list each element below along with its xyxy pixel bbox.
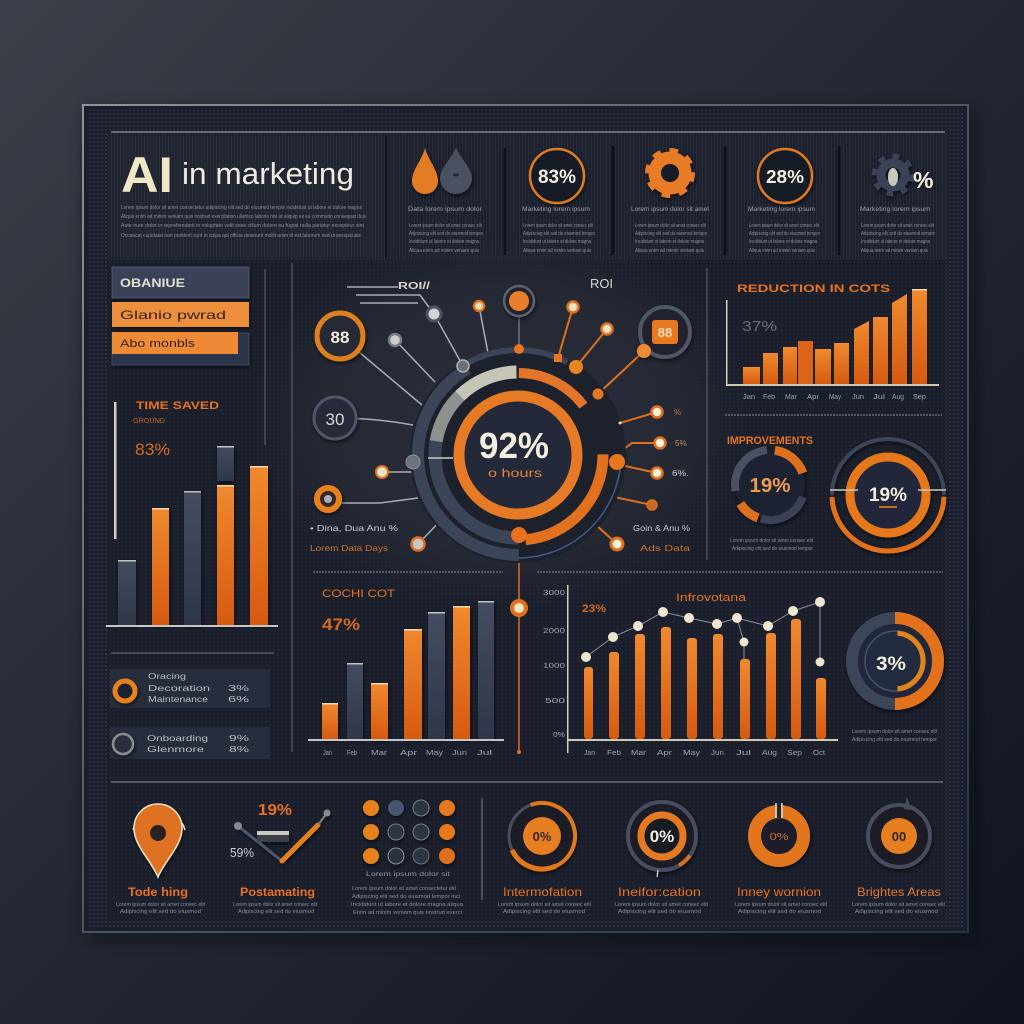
stat text	[635, 223, 707, 254]
bottom item: trend line	[230, 802, 330, 915]
caption: Brightes Areas	[857, 885, 941, 899]
row text	[148, 672, 249, 704]
caption: Intermofation	[503, 885, 582, 899]
stat text	[523, 223, 595, 254]
x axis labels: Feb	[347, 750, 357, 757]
note	[852, 902, 945, 915]
ring icon: 00	[892, 829, 906, 844]
donut note: Lorem ipsum dolor sit amet consec elit	[730, 538, 813, 544]
x axis labels: May	[426, 750, 444, 757]
heading: AI in marketing	[121, 147, 354, 203]
hub side labels: Lorem Data Days	[310, 544, 388, 553]
row text: Maintenance	[148, 695, 209, 704]
chart title: TIME SAVED	[136, 400, 219, 412]
donut: 3%	[852, 618, 938, 743]
x axis labels: Jun	[852, 394, 864, 401]
note: Lorem ipsum dolor sit amet consec elit	[735, 902, 827, 908]
badge: orange ring	[317, 488, 339, 510]
stat: drops	[408, 147, 483, 254]
small caption: Lorem ipsum dolor sit	[366, 872, 450, 878]
hub side labels: • Dina, Dua Anu %	[310, 524, 398, 533]
ring: 83%	[538, 167, 576, 188]
x axis labels: Jul	[873, 394, 886, 401]
bottom item: improvement 1	[498, 792, 591, 915]
note	[735, 902, 827, 915]
stat text: Adipiscing elit sed do eiusmod tempor	[635, 231, 707, 237]
stat text: Aliqua enim ad minim veniam quis	[861, 248, 928, 254]
caption: Marketing lorem ipsum	[522, 206, 590, 213]
hub side labels: Goin & Anu %	[633, 524, 690, 533]
stat text: Aliqua enim ad minim veniam quis	[635, 248, 704, 254]
hub side labels: 6%.	[672, 469, 689, 478]
note: Adipiscing elit sed do eiusmod	[238, 909, 314, 915]
caption: Ineifor:cation	[618, 885, 701, 899]
ROI small label: ROI//	[398, 281, 430, 292]
small donut: 19%	[750, 475, 791, 497]
bars	[118, 446, 268, 625]
heading: AI in marketing: AI	[121, 147, 173, 203]
caption: Tode hing	[128, 885, 188, 899]
caption: Marketing lorem ipsum	[860, 206, 930, 213]
main panel	[83, 105, 974, 938]
ring chart: 3%	[876, 654, 906, 675]
x axis labels: Jan	[584, 750, 595, 757]
chart: reduction in costs	[726, 283, 939, 401]
note: Lorem ipsum dolor sit amet consec elit	[615, 902, 708, 908]
stat text: Adipiscing elit sed do eiusmod tempor	[749, 231, 820, 237]
x axis labels: Sep	[913, 394, 926, 401]
caption: Inney wornion	[737, 885, 821, 899]
y axis labels: 0%	[553, 732, 565, 739]
note: Lorem ipsum dolor sit amet consectetur elit	[352, 886, 456, 892]
large donut: 19%	[869, 485, 907, 506]
stat: dark gear with percent	[860, 156, 935, 254]
stat text	[409, 223, 483, 254]
bars	[743, 289, 927, 384]
note: Adipiscing elit sed do eiusmod	[738, 909, 821, 915]
stat text: Aliqua enim ad minim veniam quis	[409, 248, 479, 254]
hub value: 92%	[479, 425, 549, 466]
x axis labels: May	[683, 750, 701, 757]
intro text	[121, 205, 366, 239]
y axis labels: 3000	[543, 590, 565, 597]
note: Lorem ipsum dolor sit amet consec elit	[116, 902, 205, 908]
note: Adipiscing elit sed do eiusmod tempor inci	[352, 894, 460, 900]
icon: orange ring	[115, 681, 135, 701]
x axis labels: Aug	[892, 394, 904, 401]
x axis labels: Jun	[711, 750, 724, 757]
badge: 30	[314, 397, 356, 439]
y axis labels: 500	[545, 698, 565, 705]
stat text: Adipiscing elit sed do eiusmod tempor	[409, 231, 483, 237]
hub rings	[373, 310, 663, 600]
ring: 28%	[766, 167, 804, 187]
chart: cost bars	[308, 588, 504, 757]
button: orange: Glanio pwrad	[120, 308, 226, 322]
note: Adipiscing elit sed do eiusmod	[618, 909, 701, 915]
intro text: Lorem ipsum dolor sit amet consectetur adipiscing elit sed do eiusmod tempor incididunt ut labore et dolore magna	[121, 205, 363, 211]
x axis labels	[743, 394, 926, 401]
note: Lorem ipsum dolor sit amet consec elit	[852, 902, 945, 908]
x axis labels: Apr	[807, 394, 820, 401]
dot grid icons	[363, 800, 455, 864]
connector line	[586, 602, 820, 662]
note	[498, 902, 591, 915]
stat text: Lorem ipsum dolor sit amet consec elit	[749, 223, 819, 229]
stat text: Lorem ipsum dolor sit amet consec elit	[523, 223, 593, 229]
x axis labels: Jun	[452, 750, 467, 757]
badge: 88: 88	[331, 328, 349, 347]
donut note: Adipiscing elit sed do eiusmod tempor	[852, 737, 937, 743]
stat text: Incididunt ut labore et dolore magna	[523, 239, 592, 245]
stat text: Incididunt ut labore et dolore magna	[409, 239, 480, 245]
intro text: Aute irure dolor in reprehenderit in voluptate velit esse cillum dolore eu fugiat nulla pariatur excepteur sint	[121, 223, 364, 229]
chart stat: 83%	[135, 440, 170, 459]
x axis labels: Jul	[477, 750, 493, 757]
stat text: Aliqua enim ad minim veniam quis	[523, 248, 591, 254]
hub label: o hours	[488, 466, 542, 480]
x axis labels: Mar	[631, 750, 647, 757]
stat text: Aliqua enim ad minim veniam quis	[749, 248, 815, 254]
chart stat: 47%	[322, 615, 360, 634]
note: Lorem ipsum dolor sit amet consec elit	[233, 902, 317, 908]
row text: Oracing	[148, 672, 186, 681]
bottom item: improvement 4	[852, 797, 945, 915]
note	[351, 886, 464, 916]
x axis labels	[584, 750, 825, 757]
x axis labels: Jan	[323, 750, 332, 757]
hub side labels: %	[674, 408, 681, 417]
x axis labels: Aug	[762, 750, 777, 757]
row text	[147, 734, 249, 754]
caption: Postamating	[240, 885, 315, 899]
list row 1	[110, 669, 270, 708]
large donut	[830, 437, 946, 553]
note: Adipiscing elit sed do eiusmod	[503, 909, 585, 915]
badge: ROI chart	[637, 307, 690, 358]
heading: AI in marketing: in marketing	[182, 156, 354, 191]
note	[116, 902, 205, 915]
connector lines	[328, 287, 660, 752]
chart stat: 23%	[582, 603, 606, 615]
nodes	[376, 286, 666, 754]
row text: 9%	[229, 734, 249, 743]
bottom item: location pin	[116, 804, 205, 915]
badge: 88	[317, 313, 363, 359]
y axis labels: 1000	[543, 663, 565, 670]
chart subtitle: GROUND	[133, 418, 165, 425]
icon: gear	[648, 151, 692, 195]
row text: 6%	[228, 695, 249, 704]
row text: Onboarding	[147, 734, 208, 743]
small donut	[725, 440, 815, 530]
icon: gray ring	[113, 734, 133, 754]
stat text	[749, 223, 820, 254]
x axis labels: Feb	[763, 394, 775, 401]
y axis labels: 2000	[543, 628, 565, 635]
x axis labels: Feb	[607, 750, 621, 757]
dots	[581, 597, 825, 666]
ring icon: 0%	[533, 829, 552, 844]
donut note: Lorem ipsum dolor sit amet consec elit	[852, 729, 937, 735]
button: dark: OBANIUE	[120, 276, 185, 290]
x axis labels: Sep	[787, 750, 802, 757]
x axis labels: Mar	[785, 394, 798, 401]
hub side labels: Ads Data	[640, 544, 691, 553]
row text: 3%	[228, 684, 249, 693]
section title: IMPROVEMENTS	[727, 435, 813, 447]
y axis labels	[543, 590, 565, 739]
chart title: REDUCTION IN COTS	[737, 283, 890, 295]
improvements donuts	[725, 435, 946, 553]
ROI label: ROI	[590, 276, 613, 291]
stat text: Incididunt ut labore et dolore magna	[635, 239, 705, 245]
ring icon: 0%	[650, 827, 674, 846]
stat text: Lorem ipsum dolor sit amet consec elit	[635, 223, 706, 229]
note: Enim ad minim veniam quis nostrud exerci	[353, 910, 462, 916]
stat: 83%	[522, 149, 595, 254]
caption: Data lorem ipsum dolor	[408, 206, 483, 213]
caption: Lorem ipsum dolor sit amet	[631, 206, 709, 213]
note: Adipiscing elit sed do eiusmod	[855, 909, 938, 915]
chart title: Infrovotana	[676, 592, 747, 604]
donut icon: 0%	[770, 832, 789, 843]
x axis labels: Jul	[736, 750, 752, 757]
chart: improvements lollipop	[543, 585, 838, 757]
percent up: 19%	[258, 802, 292, 819]
stat text: Incididunt ut labore et dolore magna	[861, 239, 931, 245]
donut note: Adipiscing elit sed do eiusmod tempor	[732, 546, 813, 552]
x axis labels: May	[829, 394, 841, 401]
stat text: Incididunt ut labore et dolore magna	[749, 239, 818, 245]
line chart	[234, 810, 330, 861]
note: Lorem ipsum dolor sit amet consec elit	[498, 902, 591, 908]
stat text: Adipiscing elit sed do eiusmod tempor	[523, 231, 595, 237]
x axis labels: Apr	[657, 750, 673, 757]
stat text: Adipiscing elit sed do eiusmod tempor	[861, 231, 935, 237]
note	[615, 902, 708, 915]
stat: 28%	[748, 149, 820, 254]
hub diagram: ROI	[310, 276, 691, 754]
note: Incididunt ut labore et dolore magna aliqua	[351, 902, 464, 908]
chart stat: 37%	[742, 318, 777, 335]
left menu buttons	[112, 267, 249, 365]
chart title: COCHI COT	[322, 588, 395, 600]
bars	[322, 601, 494, 739]
donut note	[852, 729, 937, 743]
intro text: Aliqua enim ad minim veniam quis nostrud exercitation ullamco laboris nisi ut aliquip ex ea commodo consequat duis	[121, 214, 366, 220]
note: Adipiscing elit sed do eiusmod	[120, 909, 201, 915]
icon: pin	[133, 804, 185, 877]
title panel	[111, 136, 386, 257]
hub side labels	[310, 408, 691, 553]
donut note	[730, 538, 813, 552]
hub side labels: 5%	[675, 439, 687, 448]
note	[233, 902, 317, 915]
x axis labels	[323, 750, 493, 757]
bottom item: improvement 2	[615, 789, 709, 915]
list row 2	[110, 727, 270, 759]
stat text: Lorem ipsum dolor sit amet consec elit	[861, 223, 934, 229]
row text: Glenmore	[147, 745, 205, 754]
x axis labels: Mar	[371, 750, 388, 757]
caption: Marketing lorem ipsum	[748, 206, 815, 213]
stat text: Lorem ipsum dolor sit amet consec elit	[409, 223, 482, 229]
badge: ROI chart: 88	[658, 325, 672, 340]
intro text: Occaecat cupidatat non proident sunt in culpa qui officia deserunt mollit anim id est laborum sed ut perspiciatis	[121, 233, 361, 239]
bottom item: dot grid	[351, 800, 464, 916]
x axis labels: Jan	[743, 394, 755, 401]
x axis labels: Apr	[400, 750, 418, 757]
button: orange over dark: Abo monbls	[120, 338, 196, 350]
row text: Decoration	[148, 684, 210, 693]
icon: dark gear: %	[913, 167, 933, 193]
percent down: 59%	[230, 845, 254, 860]
icon: water drops	[412, 147, 472, 194]
stat: orange gear	[631, 151, 709, 254]
x axis labels: Oct	[813, 750, 825, 757]
badge: 30: 30	[326, 410, 344, 429]
bars	[584, 619, 826, 739]
row text: 8%	[229, 745, 249, 754]
chart: time saved	[106, 400, 278, 627]
bottom item: improvement 3	[735, 803, 827, 915]
stat text	[861, 223, 935, 254]
